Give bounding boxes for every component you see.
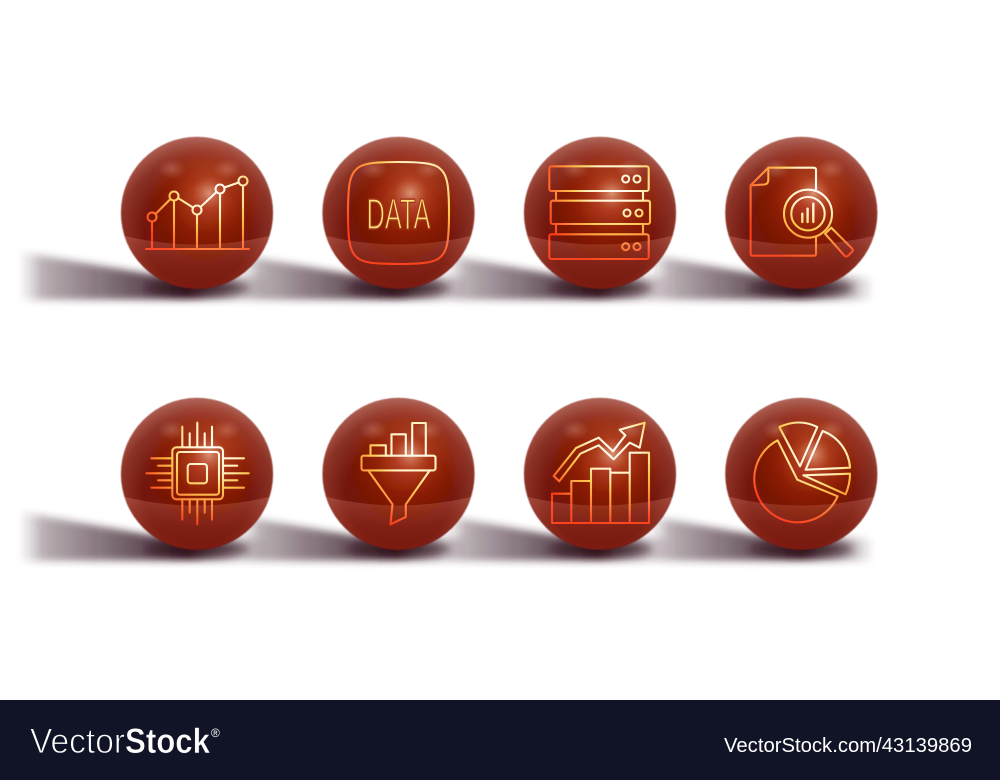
icon: exploded pie chart [754,422,850,522]
sphere: growth chart icon [524,398,676,550]
footer logo: ® [211,726,220,740]
footer logo: Stock [125,722,210,761]
icon: data word: DATA [366,190,431,239]
footer logo [30,722,220,761]
icon: processor chip [146,423,249,524]
sphere: chip icon [121,398,273,550]
sphere: line chart icon [121,137,273,289]
icon: line chart with points [146,176,249,249]
footer logo: Vector [30,722,125,761]
sphere: funnel icon [322,398,474,550]
sphere: server icon [524,137,676,289]
sphere: pie chart icon [725,398,877,550]
shadows: bottom row [20,512,873,561]
icon: document with magnifier [751,168,853,256]
shadows: top row [20,252,873,300]
icon: data funnel [362,423,436,524]
icon: server rack [549,166,650,259]
footer bar [0,700,1000,780]
icon: bars with rising arrow [552,423,649,523]
sphere: document search icon [725,137,877,289]
icon: data rounded frame [348,162,449,264]
sphere: data icon [322,137,474,289]
footer image id: VectorStock.com/43139869 [724,735,972,757]
